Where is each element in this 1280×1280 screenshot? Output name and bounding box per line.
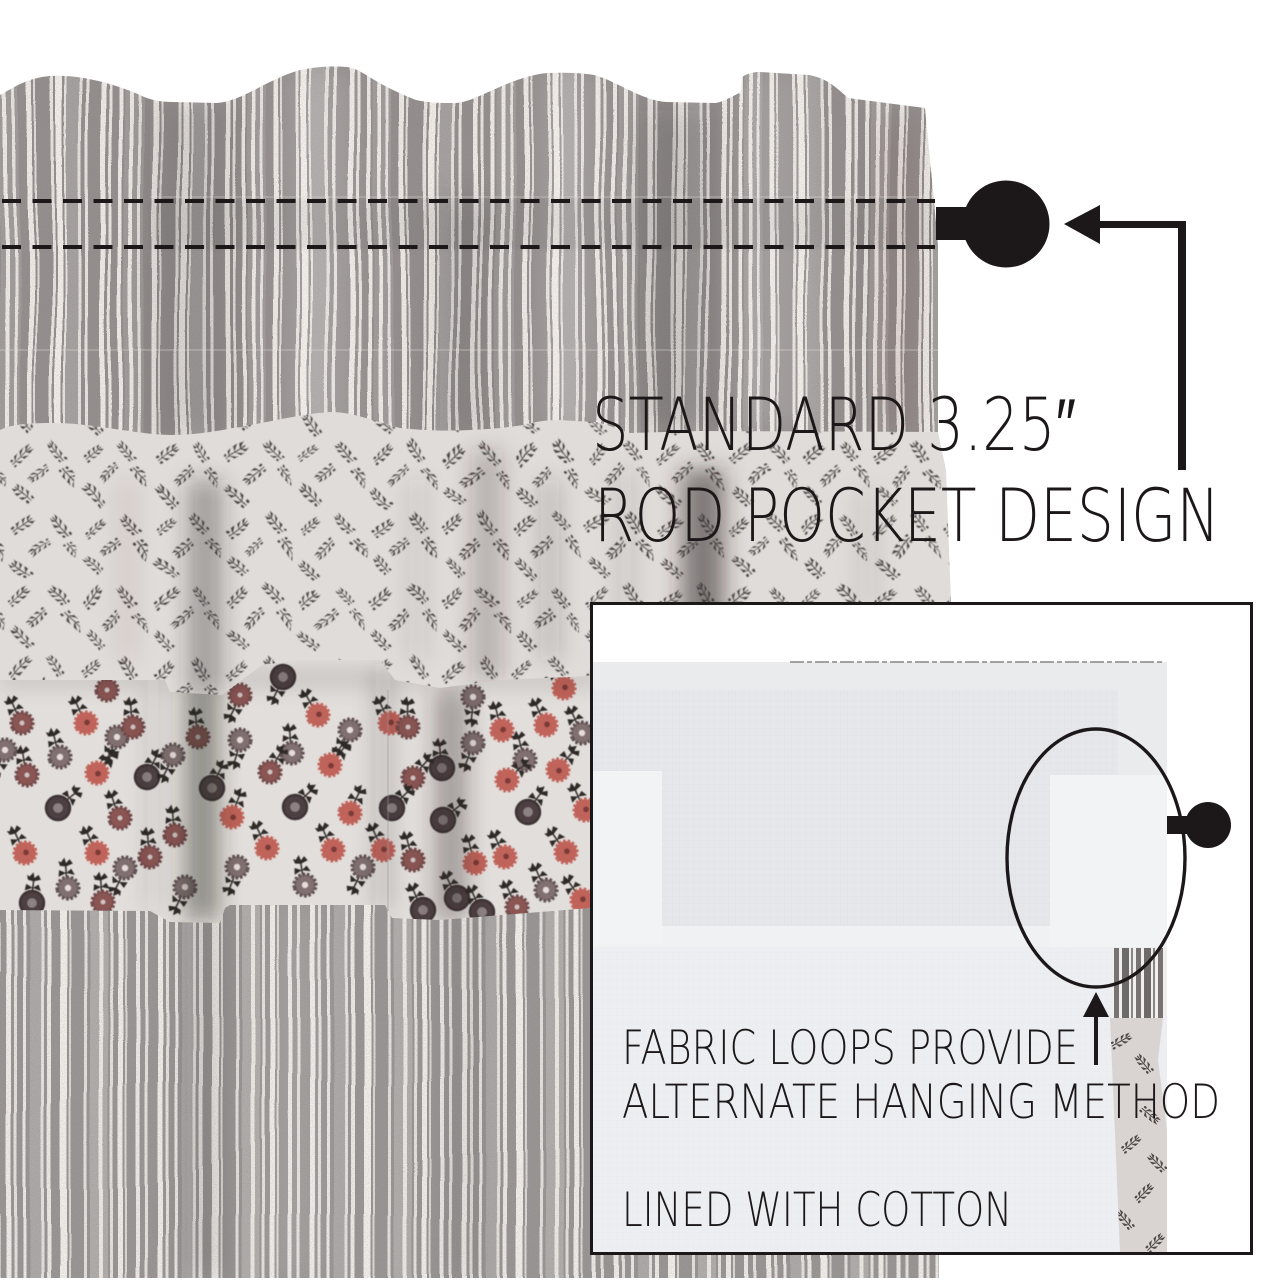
icon: curtain rod end: [936, 180, 1050, 268]
flower print: [0, 656, 600, 928]
text: lining: LINED WITH COTTON: [622, 1183, 1012, 1238]
arrow: up to ellipse: [1083, 992, 1109, 1065]
dashed lines: rod pocket channel: [2, 201, 935, 247]
text: fabric loops: [622, 1021, 1220, 1130]
icon: small curtain rod end: [1167, 802, 1231, 848]
heading: rod pocket callout: [592, 383, 1220, 559]
callout ellipse around loop: [1007, 729, 1185, 987]
panel: inset of curtain back: [592, 604, 1252, 1255]
left fabric loop: [593, 771, 662, 944]
curtain front fold: sprigs: [1110, 1018, 1167, 1252]
right fabric loop: [1050, 775, 1167, 947]
curtain front fold: stripes: [1112, 948, 1166, 1018]
panel: sprig print upper ruffle: [0, 400, 970, 700]
text: fabric loops: FABRIC LOOPS PROVIDE: [622, 1021, 1078, 1076]
panel: red floral lower ruffle: [0, 655, 600, 930]
panel: striped curtain fabric: [0, 50, 980, 1280]
arrow: from label to rod: [1064, 205, 1186, 470]
back lining fabric: [593, 662, 1167, 1252]
heading: rod pocket callout: STANDARD 3.25″: [592, 383, 1076, 468]
